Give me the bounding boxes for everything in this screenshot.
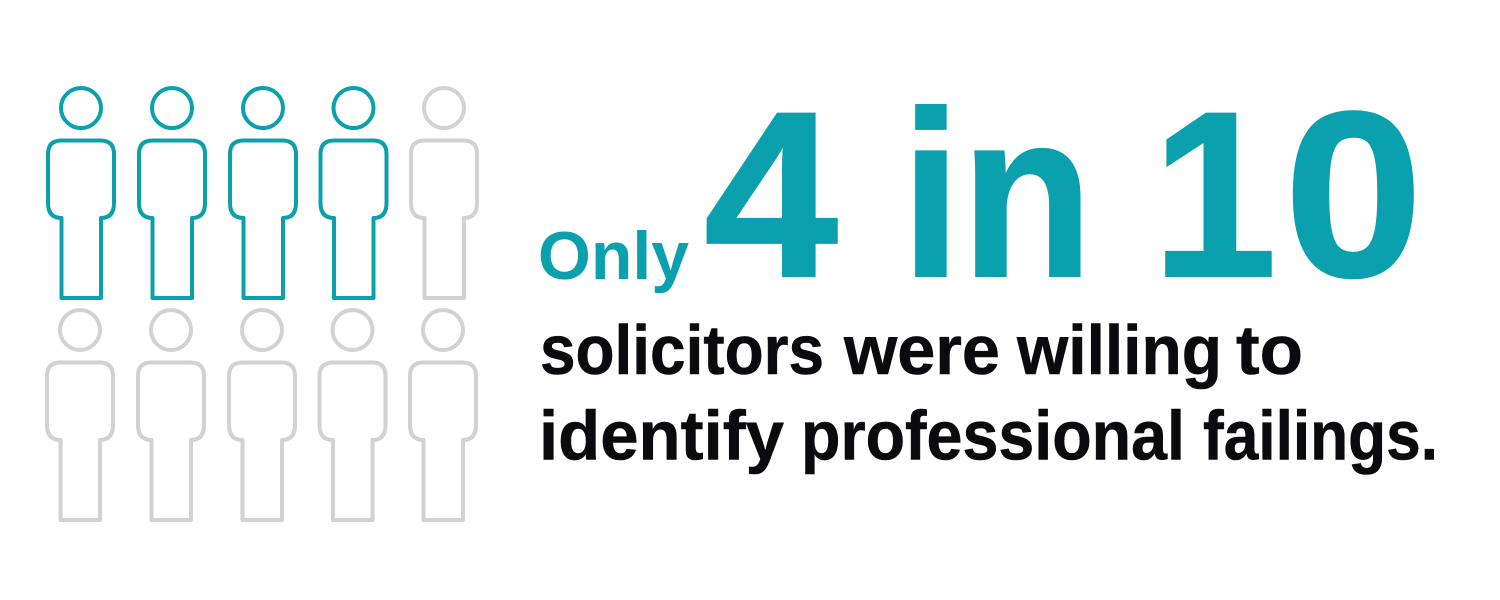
headline: 4 in 10: 4 [704,63,838,327]
text: Only: Only [538,218,689,294]
text: professional failings line: identify [539,396,784,474]
person 8 grey [229,310,295,520]
person 5 grey [411,88,477,298]
text: solicitors line: to [1236,311,1303,389]
text: professional failings line: failings. [1203,396,1438,474]
text: solicitors line: willing [1016,311,1222,389]
person 4 highlighted [320,88,386,298]
person 9 grey [320,310,386,520]
person 6 grey [47,310,113,520]
headline: 4 in 10: 1 [1152,63,1277,327]
text: solicitors line: solicitors [540,311,824,389]
text: professional failings line [539,396,1438,474]
person 1 highlighted [48,88,114,298]
headline: 4 in 10: in [901,63,1093,327]
text: solicitors line [540,311,1303,389]
person 7 grey [138,310,204,520]
text: professional failings line: professional [801,396,1185,474]
text: solicitors line: were [843,311,1000,389]
person 3 highlighted [230,88,296,298]
person 2 highlighted [139,88,205,298]
pictogram: 10 people, 4 highlighted [47,88,477,520]
headline: 4 in 10 [704,63,1423,327]
headline: 4 in 10: 0 [1284,63,1423,327]
person 10 grey [410,310,476,520]
